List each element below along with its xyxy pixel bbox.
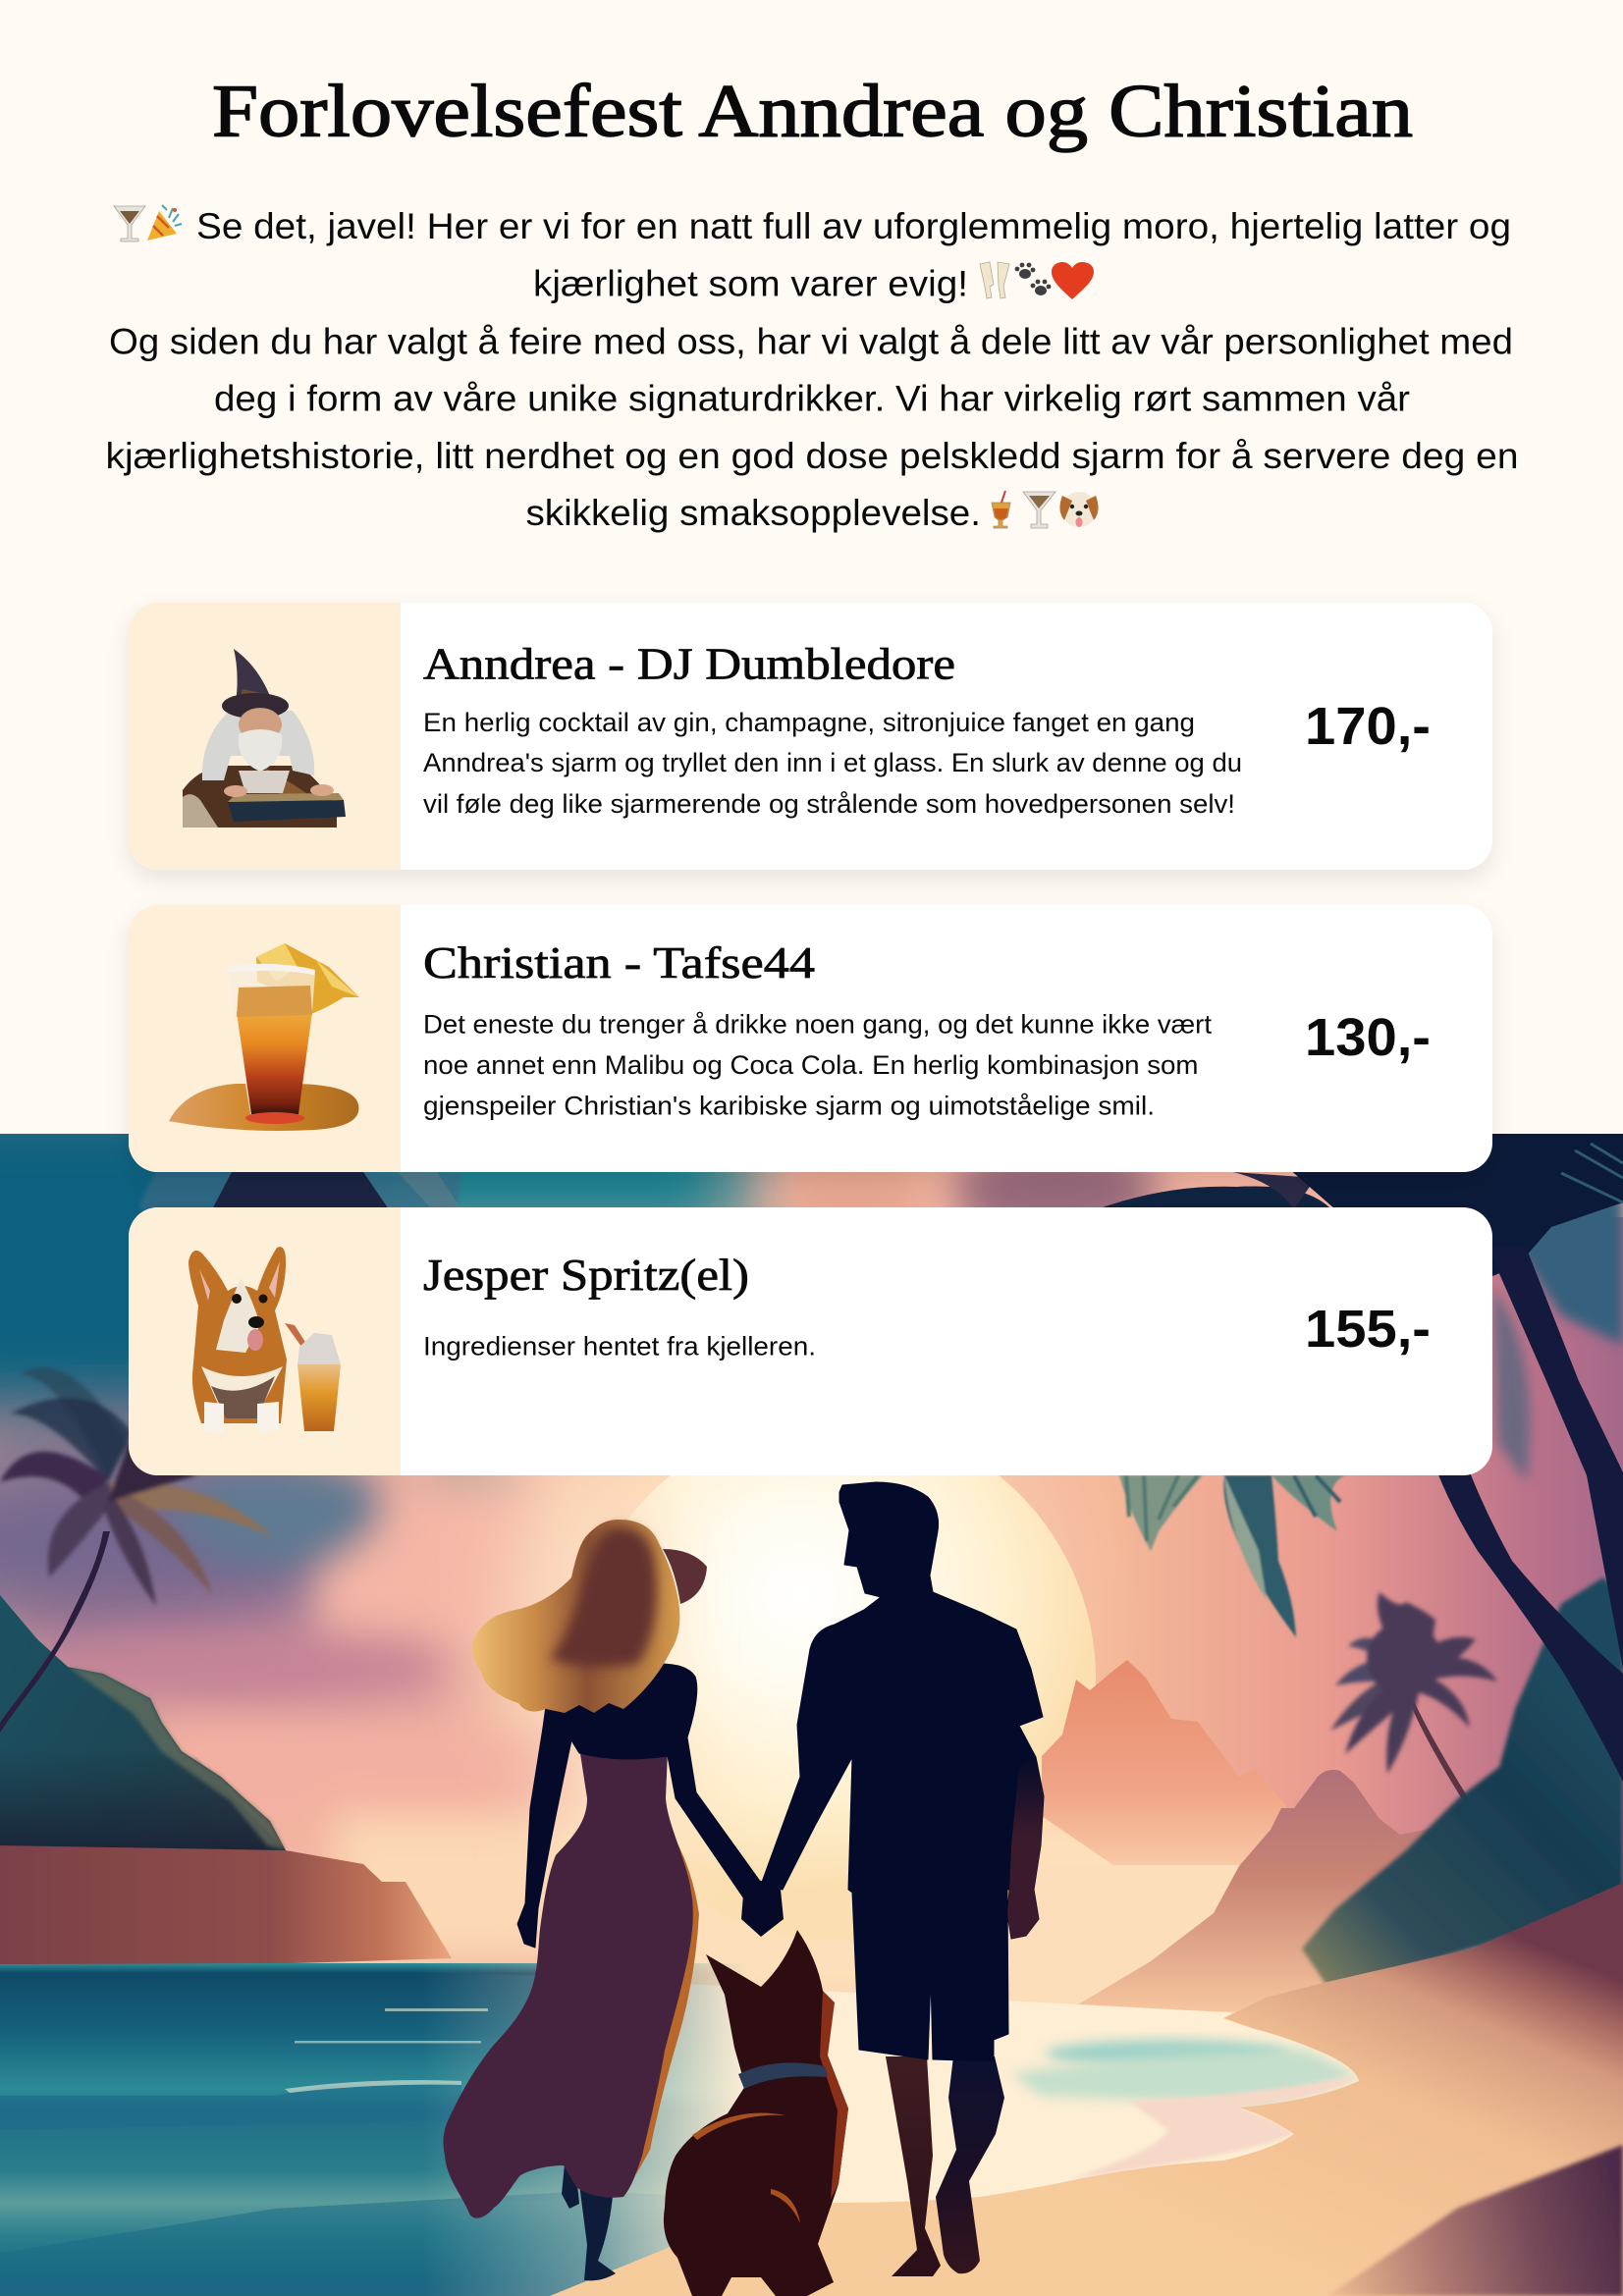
description (423, 1010, 1213, 1121)
shallow water (489, 1975, 1359, 2296)
woman legs and feet (562, 2164, 616, 2280)
left palm crown between cards (138, 1172, 461, 1209)
description: gjenspeiler Christian's karibiske sjarm og uimotståelige smil. (423, 1092, 1155, 1121)
icon: tropical drink, martini and dog face (992, 491, 1099, 528)
description: Det eneste du trenger å drikke noen gang, og det kunne ikke vært (423, 1010, 1213, 1040)
icon: martini and party popper (114, 205, 182, 241)
icon: cocktail with pineapple (169, 943, 359, 1131)
icon: corgi with drink (189, 1247, 341, 1433)
description: En herlig cocktail av gin, champagne, sitronjuice fanget en gang (423, 708, 1195, 737)
card: Anndrea - DJ Dumbledore (129, 603, 1492, 870)
left island hill (0, 1595, 286, 1855)
right tall palm trunks and fronds (1097, 1134, 1623, 1782)
intro paragraph: kjærlighet som varer evig! (533, 264, 968, 304)
card: Christian - Tafse44 (129, 905, 1492, 1172)
intro paragraph: kjærlighetshistorie, litt nerdhet og en god dose pelskledd sjarm for å servere deg en (106, 436, 1519, 476)
woman hair shadow (550, 1527, 657, 1667)
price: 130,- (1305, 1008, 1431, 1067)
icon: wizard DJ (183, 649, 346, 828)
description: vil føle deg like sjarmerende og strålende som hovedpersonen selv! (423, 789, 1235, 819)
woman figure (444, 1520, 759, 2280)
intro paragraph: Og siden du har valgt å feire med oss, har vi valgt å dele litt av vår personlighet med (109, 322, 1513, 361)
man lower arm (1007, 1757, 1044, 1939)
dog collar (738, 2062, 828, 2089)
sun disc (627, 1475, 1096, 1940)
sand shadow bottom right (1327, 2145, 1623, 2296)
intro paragraph (106, 206, 1519, 533)
price: 155,- (1305, 1300, 1431, 1359)
beach sunset illustration background (0, 1080, 1623, 2296)
price: 170,- (1305, 697, 1431, 756)
glow softening the left of the sun (511, 1463, 697, 1895)
drink name: Christian - Tafse44 (423, 937, 815, 988)
man silhouette (761, 1482, 1044, 2061)
left cliff (0, 1845, 452, 1964)
icon: champagne glasses, paws and heart (980, 262, 1094, 299)
woman dress rim light (636, 1826, 699, 2174)
drink name: Anndrea - DJ Dumbledore (423, 639, 955, 689)
description: Anndrea's sjarm og tryllet den inn i et glass. En slurk av denne og du (423, 748, 1242, 777)
intro paragraph: deg i form av våre unike signaturdrikker. Vi har virkelig rørt sammen vår (214, 379, 1410, 419)
sea (0, 1963, 785, 2296)
hanging teal palm fronds (1119, 1475, 1345, 1637)
description: Ingredienser hentet fra kjelleren. (423, 1332, 816, 1362)
dog figure (664, 1930, 848, 2296)
sand (550, 1883, 1623, 2296)
man figure (741, 1482, 1044, 2276)
drink name: Jesper Spritz(el) (423, 1250, 749, 1300)
right front mountain (1078, 1769, 1474, 2012)
description: noe annet enn Malibu og Coca Cola. En herlig kombinasjon som (423, 1050, 1198, 1080)
intro paragraph: skikkelig smaksopplevelse. (526, 493, 981, 533)
card: Jesper Spritz(el) (129, 1207, 1492, 1475)
woman hair (472, 1520, 679, 1713)
distant water on right (1009, 1865, 1239, 2014)
dog fur highlights (692, 2112, 800, 2223)
sky colour washes (0, 1080, 1623, 2012)
clasped hands (741, 1880, 784, 1937)
woman hat (663, 1549, 707, 1604)
small right palm (1329, 1590, 1498, 1798)
woman dress (444, 1747, 693, 2218)
intro paragraph: Se det, javel! Her er vi for en natt full av uforglemmelig moro, hjertelig latter og (196, 206, 1511, 246)
man legs (886, 2056, 941, 2276)
title: Forlovelsefest Anndrea og Christian (212, 71, 1413, 153)
description (423, 708, 1242, 819)
right bush (1302, 1577, 1623, 1987)
left palm (0, 1367, 273, 1733)
sea foam highlights (285, 2008, 488, 2093)
right background mountain (1042, 1660, 1286, 1870)
woman upper body and arms (517, 1664, 759, 1948)
teal shallows and pink foam (1011, 2040, 1359, 2179)
